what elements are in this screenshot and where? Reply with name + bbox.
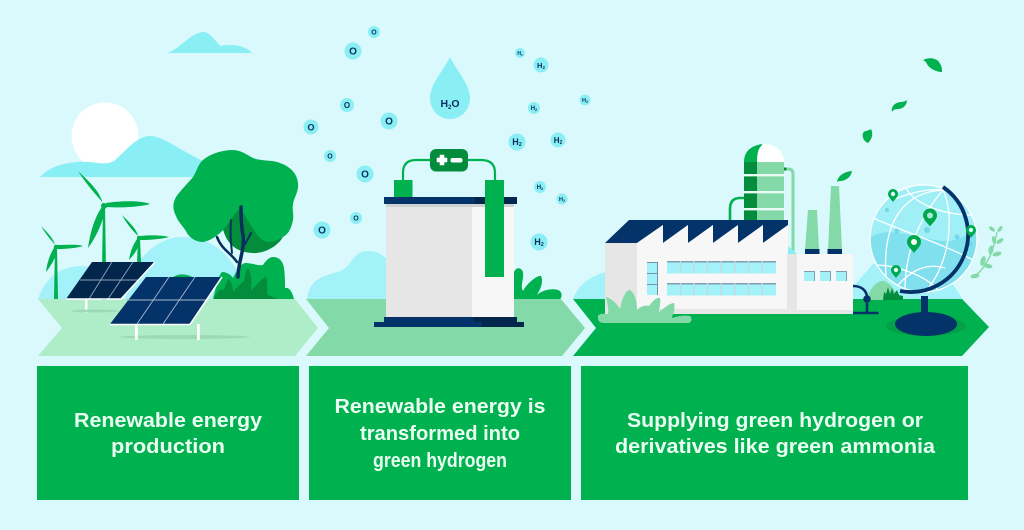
hydrogen bubbles: H <box>512 137 519 147</box>
caption text: Renewable energy <box>74 409 263 432</box>
turbine: large <box>78 171 150 300</box>
label: H2O: O <box>451 98 460 110</box>
hydrogen bubbles: 2 <box>560 140 562 146</box>
window row upper <box>667 261 776 274</box>
battery <box>430 149 468 172</box>
globe stand <box>886 296 966 336</box>
rear panel leg <box>85 299 88 313</box>
solar panel: front <box>110 277 250 340</box>
wind turbines <box>41 171 169 300</box>
hydrogen bubbles: H <box>534 237 541 247</box>
caption panel: stage two: transformed into <box>360 422 520 445</box>
tower bands <box>743 174 785 210</box>
electrolyser <box>374 149 524 327</box>
background hills: stage one <box>38 237 240 299</box>
globe arm <box>900 187 968 292</box>
solar panel: rear <box>66 262 155 313</box>
bushes beside tree <box>170 257 294 299</box>
turbine: medium <box>122 215 169 275</box>
narrow side window <box>647 262 658 295</box>
oxygen bubbles: O <box>361 170 369 180</box>
hydrogen bubbles: H <box>554 136 560 145</box>
caption text: Supplying green hydrogen or <box>627 409 923 432</box>
front panel face <box>110 277 221 324</box>
caption panel: stage three <box>581 366 968 500</box>
background hill: behind globe <box>850 264 964 301</box>
caption panel: stage one <box>37 366 299 500</box>
pin small <box>891 265 901 278</box>
hydrogen bubbles: 2 <box>541 186 544 191</box>
plants beside electrolyser <box>514 268 562 299</box>
chevron: stage one ground <box>38 299 318 356</box>
water drop <box>430 57 470 119</box>
turbine: small <box>41 226 83 299</box>
caption panel: stage two: green hydrogen <box>373 449 507 472</box>
tower pipes <box>730 198 744 222</box>
background hill: stage three <box>573 272 606 299</box>
tank left face <box>386 204 472 317</box>
oxygen bubbles: O <box>349 46 357 58</box>
tower dome <box>744 144 762 162</box>
hydrogen bubbles: H <box>582 98 586 104</box>
hydrogen bubbles: H <box>517 51 521 57</box>
tank lid <box>384 197 517 204</box>
annex <box>787 254 797 314</box>
caption panel: stage one: production <box>111 435 225 458</box>
caption panel: stage three: derivatives like green ammonia <box>615 435 936 458</box>
bush in front of factory <box>598 290 691 323</box>
oxygen bubbles <box>304 26 398 238</box>
hydrogen bubbles: 2 <box>542 65 545 70</box>
cathode <box>485 180 504 277</box>
oxygen bubbles: O <box>371 30 377 36</box>
chevron: stage three ground <box>573 299 989 356</box>
minus sign <box>450 158 462 162</box>
tree <box>173 150 298 277</box>
hydrogen bubbles: H <box>531 106 535 112</box>
sawtooth roof <box>605 220 788 243</box>
globe grid <box>870 185 977 292</box>
pin large <box>923 208 937 226</box>
plus sign <box>437 155 447 165</box>
factory tower <box>730 144 797 256</box>
oxygen bubbles: O <box>385 116 393 128</box>
globe <box>870 185 977 336</box>
tree trunk <box>217 207 251 277</box>
globe land dots <box>885 208 972 246</box>
oxygen bubbles: O <box>318 226 326 236</box>
hydrogen bubbles <box>508 48 590 250</box>
caption panel: stage two <box>309 366 571 500</box>
hydrogen bubbles: 2 <box>535 107 538 112</box>
factory building <box>605 220 853 314</box>
oxygen bubbles: O <box>307 122 315 132</box>
hydrogen bubbles: 2 <box>586 100 588 104</box>
branch plant behind globe <box>970 225 1004 279</box>
tree crown <box>173 150 298 242</box>
hump behind front panel <box>170 274 196 280</box>
cloud: top sky <box>167 32 252 53</box>
window row lower <box>667 283 776 296</box>
wires <box>403 160 495 181</box>
label: H2O: H <box>440 98 448 110</box>
oxygen bubbles: O <box>353 216 359 222</box>
rear panel face <box>66 262 155 299</box>
front wall <box>637 225 788 314</box>
floating leaves <box>863 58 942 143</box>
hydrogen bubbles: 2 <box>519 142 522 148</box>
hydrogen bubbles: 2 <box>563 199 565 203</box>
pin large <box>907 235 921 253</box>
tree crown shadow <box>222 209 285 253</box>
hydrogen bubbles: H <box>537 61 542 70</box>
background hills: stage two <box>307 251 390 299</box>
tank base <box>384 317 517 322</box>
hydrogen bubbles: H <box>559 197 563 203</box>
chimneys <box>805 186 842 254</box>
tower body <box>744 162 757 222</box>
map pins <box>888 189 976 278</box>
chevron: stage two ground <box>306 299 585 356</box>
pin small <box>888 189 898 202</box>
leaf on chimney <box>837 171 852 182</box>
pin small <box>966 225 976 238</box>
globe sphere <box>870 185 977 292</box>
tank right face <box>472 204 514 317</box>
grass and shrubs behind globe <box>867 281 903 300</box>
hydrogen bubbles: H <box>537 185 541 191</box>
front panel legs <box>135 324 138 340</box>
caption text: Renewable energy is <box>334 395 546 418</box>
hydrogen bubbles: 2 <box>521 53 523 57</box>
label: H2O: 2 <box>448 105 452 111</box>
annex windows <box>804 271 846 281</box>
anode <box>394 180 412 197</box>
pipe valve <box>853 286 878 313</box>
icon: sun <box>72 102 138 170</box>
oxygen bubbles: O <box>327 154 333 160</box>
hydrogen bubbles: 2 <box>541 242 544 248</box>
side wall <box>605 243 637 314</box>
cloud: mountain behind turbines <box>40 136 215 177</box>
oxygen bubbles: O <box>344 101 350 110</box>
